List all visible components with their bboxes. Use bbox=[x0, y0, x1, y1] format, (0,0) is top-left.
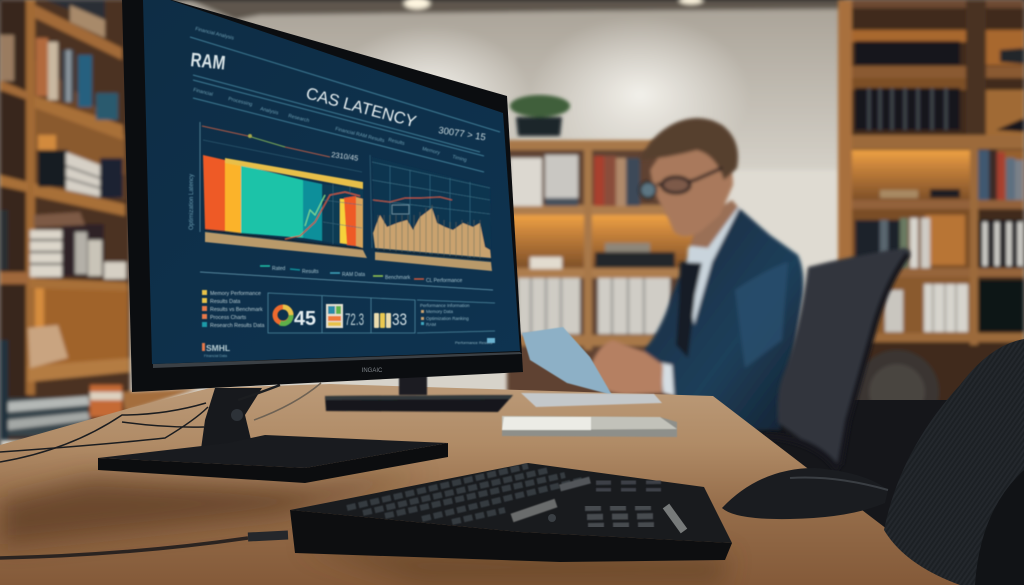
screen content: dashboard bbox=[189, 26, 500, 358]
left bookcase bbox=[0, 0, 200, 440]
shirt cuff bbox=[661, 363, 674, 396]
front office chair bbox=[884, 339, 1024, 585]
chart legend: Rated bbox=[272, 266, 286, 272]
document held by person bbox=[522, 327, 612, 395]
bottom panels: 72.3 bbox=[345, 310, 364, 329]
bottom panels: 33 bbox=[392, 310, 407, 329]
monitor brand label: INGAIC bbox=[362, 368, 383, 374]
suit jacket bbox=[637, 207, 803, 430]
navigation keys bbox=[596, 481, 662, 491]
header lines bbox=[190, 37, 500, 172]
glasses bbox=[657, 168, 722, 186]
donut stat bbox=[275, 307, 291, 323]
header small labels: Timing bbox=[452, 154, 468, 164]
heading: RAM: RAM bbox=[190, 48, 227, 74]
chart legend: Benchmark bbox=[385, 275, 411, 281]
chart legend: Results bbox=[302, 269, 319, 275]
shirt and tie bbox=[686, 207, 740, 325]
keyboard shadow and front face bbox=[290, 510, 732, 562]
header small labels: Analysis bbox=[260, 106, 280, 117]
cables bbox=[0, 383, 321, 558]
keyboard bbox=[290, 463, 732, 562]
middle bookcase bbox=[507, 140, 702, 410]
monitor chin highlight bbox=[153, 352, 522, 368]
keyboard top surface bbox=[290, 463, 732, 543]
left chart: 2310/45 bbox=[331, 150, 359, 163]
heading: CAS LATENCY: CAS LATENCY bbox=[304, 84, 418, 131]
left legend list: Research Results Data bbox=[210, 323, 265, 329]
tile stat bbox=[326, 304, 343, 328]
bottles stat bbox=[374, 313, 379, 328]
monitor screen bbox=[143, 0, 520, 364]
bottom panels: 45 bbox=[294, 308, 316, 330]
hand bbox=[587, 340, 663, 395]
rear office chair bbox=[765, 248, 910, 470]
footer logo bbox=[202, 343, 205, 351]
header small labels: Financial RAM Results bbox=[335, 126, 386, 144]
right notes: RAM bbox=[426, 322, 436, 327]
bottom panels bbox=[200, 272, 495, 333]
header small labels: Results bbox=[388, 137, 406, 147]
right notes bbox=[420, 303, 470, 327]
screen content: dashboard: SMHL bbox=[206, 343, 230, 353]
monitor stand bbox=[98, 388, 448, 483]
rear monitor base bbox=[325, 375, 513, 412]
mouse bbox=[722, 468, 888, 519]
chart legend: RAM Data bbox=[342, 272, 365, 278]
screen content: dashboard: Financial Data bbox=[204, 354, 227, 358]
left legend list: Results vs Benchmark bbox=[210, 307, 263, 313]
footer right: Performance Results bbox=[455, 340, 492, 345]
header small labels bbox=[193, 26, 468, 164]
desk shadows bbox=[0, 470, 730, 585]
right notes: Performance Information bbox=[420, 303, 470, 308]
face bbox=[650, 139, 733, 236]
main key rows bbox=[347, 466, 590, 522]
floor shadow under desk bbox=[690, 400, 1024, 585]
header small labels: Financial bbox=[193, 87, 213, 98]
enter key bbox=[666, 506, 684, 531]
header small labels: Memory bbox=[422, 146, 441, 156]
right notes: Optimization Ranking bbox=[426, 316, 469, 321]
sleeve highlight bbox=[735, 262, 788, 368]
plant on bookcase bbox=[510, 95, 570, 136]
readout: 30077 > 15 bbox=[438, 125, 486, 143]
neck bbox=[690, 200, 738, 248]
chart legend: CL Performance bbox=[426, 278, 462, 284]
monitor bezel bbox=[122, 0, 523, 392]
right notes: Memory Data bbox=[426, 309, 454, 314]
header small labels: Research bbox=[288, 113, 310, 124]
stand base bbox=[98, 443, 448, 483]
left legend list: Results Data bbox=[210, 299, 240, 305]
tablet on desk bbox=[521, 393, 662, 407]
left legend list: Memory Performance bbox=[210, 291, 261, 297]
header small labels: Financial Analysis bbox=[195, 26, 235, 42]
left legend list: Process Charts bbox=[210, 315, 247, 321]
chart legend bbox=[260, 266, 462, 284]
notebook on desk bbox=[502, 416, 677, 437]
desk surface bbox=[0, 384, 960, 585]
y axis label: Optimization Latency bbox=[189, 174, 195, 230]
right chart bbox=[370, 155, 492, 271]
left chart bbox=[200, 122, 367, 258]
right bookcase bbox=[838, 0, 1024, 440]
left legend list bbox=[202, 290, 265, 329]
numeric keypad bbox=[585, 507, 662, 526]
person in suit reading document bbox=[587, 118, 803, 430]
header small labels: Processing bbox=[228, 96, 253, 108]
hair bbox=[640, 118, 738, 180]
